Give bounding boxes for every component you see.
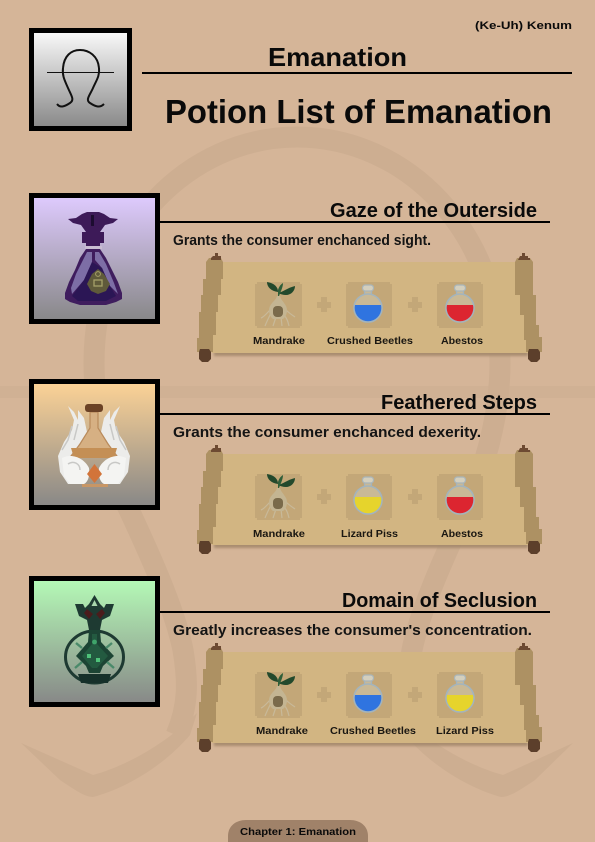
ingredient: Mandrake: Mandrake (253, 335, 305, 347)
panel: Gaze of the Outerside (32, 196, 550, 362)
ingredient: Lizard Piss: Lizard Piss (436, 725, 494, 737)
section title: Domain of Seclusion (342, 590, 537, 612)
recipe scroll (197, 643, 542, 752)
title rule (160, 413, 550, 415)
ingredient: Crushed Beetles: Crushed Beetles (327, 335, 413, 347)
section title: Gaze of the Outerside (330, 200, 537, 222)
panel: Feathered Steps (32, 382, 550, 554)
potion icon: purple flask (32, 196, 158, 322)
panel: Domain of Seclusion (32, 578, 550, 752)
ingredient: Crushed Beetles (330, 675, 416, 737)
title rule (160, 611, 550, 613)
description: Grants the consumer enchanced dexerity. (173, 425, 481, 441)
ingredient: Lizard Piss (341, 477, 398, 540)
icon: emanation symbol box (32, 30, 130, 128)
footer chapter tab: Chapter 1: Emanation (240, 826, 356, 838)
recipe scroll (197, 445, 542, 554)
ingredient: Mandrake (253, 474, 305, 540)
heading rule (142, 72, 572, 74)
author label: (Ke-Uh) Kenum (475, 20, 572, 32)
chapter heading: Emanation (268, 42, 407, 72)
ingredient: Lizard Piss: Lizard Piss (341, 528, 398, 540)
ingredient: Abestos: Abestos (441, 528, 483, 540)
description: Greatly increases the consumer's concentration. (173, 623, 532, 639)
title rule (160, 221, 550, 223)
ingredient: Crushed Beetles (327, 285, 413, 347)
ingredient: Abestos (441, 285, 483, 347)
footer chapter tab (228, 820, 368, 842)
ingredient: Mandrake (253, 282, 305, 347)
section title: Feathered Steps (381, 392, 537, 414)
ingredient: Abestos (441, 477, 483, 540)
page title: Potion List of Emanation (165, 93, 552, 130)
background watermark: emanation symbol (0, 137, 595, 797)
recipe scroll (197, 253, 542, 362)
ingredient: Crushed Beetles: Crushed Beetles (330, 725, 416, 737)
potion icon: winged flask (32, 382, 158, 508)
ingredient: Mandrake: Mandrake (253, 528, 305, 540)
ingredient: Mandrake: Mandrake (256, 725, 308, 737)
ingredient: Lizard Piss (436, 675, 494, 737)
potion icon: green flask (32, 578, 158, 704)
description: Grants the consumer enchanced sight. (173, 233, 431, 249)
ingredient: Abestos: Abestos (441, 335, 483, 347)
ingredient: Mandrake (256, 672, 308, 737)
